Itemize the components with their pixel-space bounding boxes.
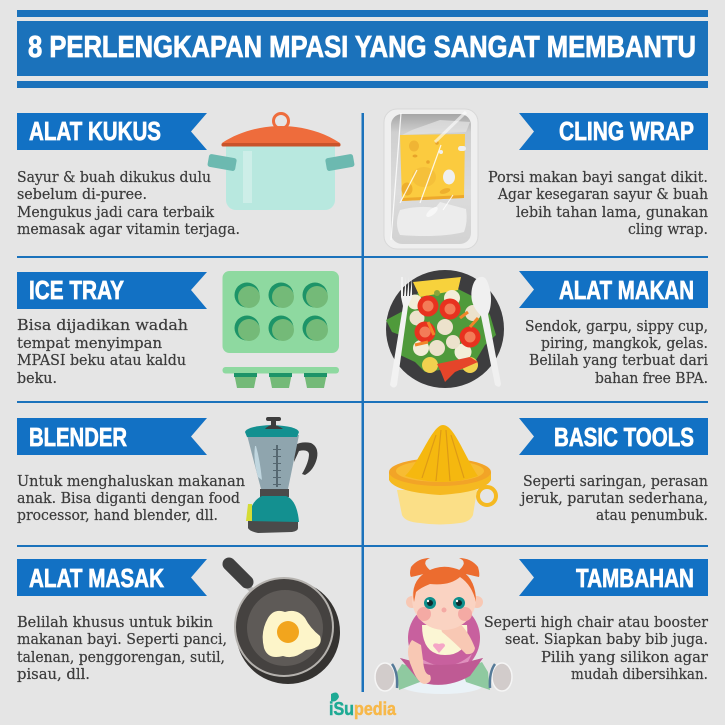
text: ice tray: tempat menyimpan (17, 336, 162, 352)
text: tambahan: seat. Siapkan baby bib juga. (505, 632, 708, 648)
text: cling wrap: Agar kesegaran sayur & buah (497, 187, 708, 203)
icon: wrapped cheese tray (384, 109, 478, 249)
text: alat makan: bahan free BPA. (595, 371, 708, 387)
text: alat kukus: Mengukus jadi cara terbaik (17, 205, 214, 221)
logo: iSupedia: iSupedia (329, 699, 397, 719)
text: ice tray (17, 318, 188, 387)
title banner (17, 10, 708, 88)
icon: baby with bib (375, 558, 512, 694)
panel: blender (17, 417, 317, 533)
panel: alat makan (386, 270, 708, 388)
text: alat makan: piring, mangkok, gelas. (541, 336, 708, 352)
text: tambahan (484, 615, 708, 683)
panel: ice tray (17, 271, 339, 388)
text: cling wrap: lebih tahan lama, gunakan (516, 205, 708, 221)
text: alat makan: Sendok, garpu, sippy cup, (525, 319, 708, 335)
heading ribbon: blender: BLENDER (29, 422, 127, 452)
panel: cling wrap (384, 109, 708, 249)
text: alat makan: Belilah yang terbuat dari (529, 353, 708, 369)
spoon (471, 277, 501, 387)
heading ribbon: tambahan: TAMBAHAN (576, 563, 694, 593)
icon: blender (245, 417, 317, 533)
icon: citrus juicer (389, 425, 496, 524)
heading ribbon: cling wrap (519, 113, 708, 150)
icon: ice tray (222, 271, 339, 388)
text: alat makan (525, 319, 708, 387)
text: tambahan: Pilih yang silikon agar (541, 650, 708, 666)
heading ribbon: alat makan (519, 271, 708, 308)
icon: steamer pot (207, 114, 355, 210)
icon: salad plate with cutlery (386, 270, 504, 388)
text: tambahan: Seperti high chair atau booster (484, 615, 708, 631)
text: basic tools (519, 474, 708, 524)
heading ribbon: ice tray (17, 272, 207, 309)
heading ribbon: alat masak: ALAT MASAK (29, 563, 164, 593)
panel: tambahan (375, 558, 708, 694)
text: ice tray: beku. (17, 371, 57, 387)
text: basic tools: jeruk, parutan sederhana, (519, 491, 708, 507)
text: tambahan: mudah dibersihkan. (571, 667, 708, 683)
text: alat masak: talenan, penggorengan, sutil, (17, 650, 225, 666)
heading ribbon: cling wrap: CLING WRAP (559, 116, 694, 146)
text: alat masak: makanan bayi. Seperti panci, (17, 632, 227, 648)
text: alat masak: pisau, dll. (17, 667, 90, 683)
heading ribbon: tambahan (519, 559, 708, 596)
text: blender (17, 474, 245, 524)
text: blender: processor, hand blender, dll. (17, 508, 218, 524)
panel: basic tools (389, 418, 708, 524)
panel: alat masak (17, 559, 340, 684)
text: ice tray: Bisa dijadikan wadah (17, 318, 188, 334)
heading ribbon: ice tray: ICE TRAY (29, 275, 124, 305)
icon: frying pan with egg (229, 564, 340, 684)
text: basic tools: Seperti saringan, perasan (523, 474, 708, 490)
text: alat kukus: memasak agar vitamin terjaga. (17, 222, 240, 238)
text: alat kukus: sebelum di-puree. (17, 187, 147, 203)
text: ice tray: MPASI beku atau kaldu (17, 353, 186, 369)
text: cling wrap (488, 170, 708, 238)
heading ribbon: basic tools (519, 418, 708, 455)
fork (390, 277, 412, 388)
text: blender: anak. Bisa diganti dengan food (17, 491, 240, 507)
text: alat masak: Belilah khusus untuk bikin (17, 615, 213, 631)
text: alat kukus (17, 170, 240, 238)
text: basic tools: atau penumbuk. (596, 508, 708, 524)
panel: alat kukus (17, 113, 355, 238)
heading ribbon: alat kukus: ALAT KUKUS (29, 116, 161, 146)
text: blender: Untuk menghaluskan makanan (17, 474, 245, 490)
text: alat kukus: Sayur & buah dikukus dulu (17, 170, 211, 186)
text: cling wrap: cling wrap. (628, 222, 708, 238)
text: alat masak (17, 615, 227, 683)
text: cling wrap: Porsi makan bayi sangat dikit. (488, 170, 708, 186)
heading ribbon: blender (17, 418, 207, 455)
